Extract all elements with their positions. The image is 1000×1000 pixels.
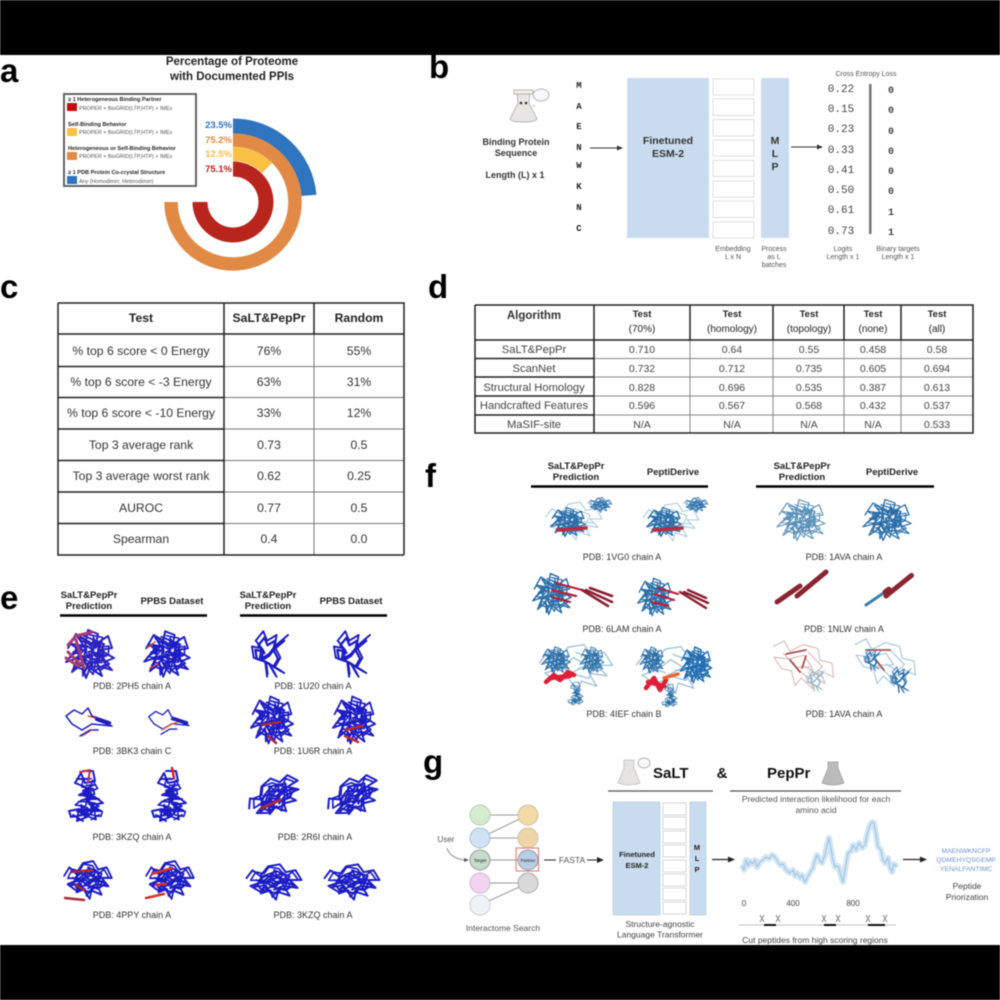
column headers: SaLT&PepPr	[548, 461, 605, 472]
column headers: PeptiDerive	[647, 467, 699, 478]
ESM block: ESM-2	[626, 861, 648, 870]
chart caption: amino acid	[795, 805, 837, 815]
protein structures	[531, 497, 924, 707]
table grid	[475, 305, 973, 433]
logits: 0.73	[828, 226, 854, 238]
table text: (homology)	[707, 324, 757, 335]
table text: 33%	[257, 406, 281, 420]
structure captions: PDB: 2PH5 chain A	[93, 681, 171, 691]
sequence letters: A	[576, 102, 582, 112]
panel e: PPBS structure comparison	[0, 579, 387, 920]
panel a: proteome PPI radial chart	[0, 52, 309, 264]
logits: 0.41	[828, 165, 855, 177]
table text: (70%)	[629, 324, 655, 335]
table text: 0.25	[347, 469, 371, 483]
logits: 0.61	[828, 205, 855, 217]
table text: N/A	[723, 419, 741, 431]
heading: SaLT and PepPr: PepPr	[767, 765, 811, 782]
structure captions: PDB: 1NLW chain A	[804, 624, 884, 634]
interactome caption: Interactome Search	[466, 923, 540, 933]
structure captions: PDB: 1U20 chain A	[274, 681, 352, 691]
chart axis labels: 800	[846, 899, 860, 908]
table text: Random	[335, 311, 384, 325]
structure captions	[92, 681, 353, 920]
sequence letters: E	[576, 122, 582, 132]
percentage labels	[205, 120, 233, 175]
binary targets: 0	[888, 106, 894, 117]
structure captions	[582, 552, 884, 719]
table text: (all)	[929, 324, 945, 335]
table text: N/A	[633, 419, 651, 431]
column headers: Prediction	[779, 472, 825, 483]
table text: N/A	[864, 419, 882, 431]
transformer caption: Language Transformer	[617, 930, 703, 940]
column headers: Prediction	[245, 601, 291, 612]
table text: 0.5	[351, 438, 368, 452]
column headers	[60, 590, 387, 616]
panel b: model architecture	[429, 48, 920, 269]
logits: 0.22	[828, 84, 854, 96]
table text: Test	[864, 309, 883, 320]
binary targets: 0	[888, 86, 894, 97]
structure captions: PDB: 1U6R chain A	[274, 746, 352, 756]
peptide prioritization caption: Priorization	[946, 892, 989, 902]
panel d: algorithm comparison table	[428, 268, 973, 433]
ESM block	[613, 802, 706, 915]
table text: 0.432	[860, 400, 886, 412]
logits	[828, 84, 855, 238]
table text: % top 6 score < -3 Energy	[70, 375, 213, 389]
table text: 0.828	[629, 382, 655, 394]
logits: 0.23	[828, 124, 854, 136]
table text: 0.712	[719, 363, 745, 375]
table text: 55%	[347, 344, 371, 358]
input description: Length (L) x 1	[486, 170, 544, 180]
percentage labels: 75.1%	[205, 164, 233, 175]
table text	[67, 311, 384, 546]
column headers: Prediction	[66, 601, 112, 612]
structure captions: PDB: 4PPY chain A	[93, 910, 171, 920]
logits: 0.50	[828, 185, 854, 197]
sequence letters: C	[576, 224, 582, 234]
table text: ScanNet	[513, 363, 556, 375]
binary targets: 0	[888, 167, 894, 178]
radial bars	[171, 126, 309, 264]
peptide cuts	[739, 915, 896, 925]
FASTA arrow: FASTA	[559, 855, 585, 865]
structure captions: PDB: 2R6I chain A	[278, 832, 352, 842]
legend: Heterogeneous or Self-Binding Behavior	[68, 146, 177, 152]
structure captions: PDB: 3BK3 chain C	[93, 746, 172, 756]
table text: 0.596	[629, 400, 655, 412]
input description: Binding Protein	[482, 137, 550, 147]
table text: MaSIF-site	[507, 419, 561, 431]
arrow: MLP to logits	[791, 144, 823, 150]
sequence letters: N	[576, 203, 582, 213]
architecture captions: L x N	[725, 254, 741, 261]
chart axis labels: 400	[786, 899, 800, 908]
binary targets	[888, 86, 894, 239]
legend: PROPER + BioGRID(LTP,HTP) + IMEx	[79, 154, 173, 160]
logits: 0.33	[828, 145, 854, 157]
table text: 0.58	[927, 344, 947, 356]
MLP block: P	[771, 161, 779, 173]
column headers: Prediction	[553, 472, 599, 483]
table text: 0.537	[924, 400, 950, 412]
ESM-2 block	[627, 78, 709, 238]
architecture captions: Length x 1	[882, 254, 914, 261]
binary targets: 0	[888, 127, 894, 138]
table text: 0.0	[351, 532, 368, 546]
table text: 0.387	[860, 382, 886, 394]
chart title: with Documented PPIs	[169, 71, 294, 83]
cut caption: Cut peptides from high scoring regions	[742, 935, 888, 945]
table text: 0.568	[796, 400, 822, 412]
architecture captions: as L	[767, 254, 781, 261]
binary targets: 1	[888, 228, 894, 239]
column headers: SaLT&PepPr	[774, 461, 831, 472]
heading: SaLT and PepPr: SaLT	[653, 765, 689, 782]
peptide prioritization caption: Peptide	[953, 881, 982, 891]
table text: Test	[129, 311, 153, 325]
panel c: benchmark table	[0, 268, 404, 555]
table text: (none)	[859, 324, 887, 335]
label f: f	[425, 457, 437, 494]
input description: Sequence	[495, 148, 537, 158]
table text	[480, 309, 950, 431]
table text: 63%	[257, 375, 281, 389]
table text: Algorithm	[507, 310, 561, 322]
percentage labels: 75.2%	[205, 135, 233, 146]
sequence letters: W	[576, 161, 582, 171]
sequence letters: N	[576, 143, 582, 153]
table text: Test	[928, 309, 947, 320]
peptide sequences	[936, 848, 996, 873]
table text: 0.567	[719, 400, 745, 412]
table text: Test	[800, 309, 819, 320]
architecture captions: batches	[762, 262, 787, 269]
chart axis labels: 0	[742, 899, 747, 908]
table text: AUROC	[119, 501, 163, 515]
legend: ≥ 1 PDB Protein Co-crystal Structure	[68, 170, 165, 176]
column headers: PPBS Dataset	[141, 596, 204, 607]
architecture captions: Process	[761, 246, 787, 253]
sequence letters	[576, 81, 582, 234]
table text: 76%	[257, 344, 281, 358]
divider bar	[869, 84, 872, 234]
structure captions: PDB: 3KZQ chain A	[92, 832, 172, 842]
architecture captions: Logits	[834, 246, 853, 253]
column headers: PeptiDerive	[866, 467, 918, 478]
chart title: Percentage of Proteome	[166, 56, 298, 68]
binary targets: 0	[888, 187, 894, 198]
binary targets: 1	[888, 208, 894, 219]
label c: c	[0, 268, 18, 305]
table text: 0.62	[257, 469, 281, 483]
table text: SaLT&PepPr	[233, 311, 306, 325]
icon: salt flask with thought bubble	[510, 89, 549, 122]
column headers: SaLT&PepPr	[61, 590, 118, 601]
table text: 0.55	[799, 344, 819, 356]
loss title: Cross Entropy Loss	[835, 71, 897, 78]
ESM block: M	[694, 843, 700, 852]
arrow to peptides	[903, 856, 927, 862]
column headers: PPBS Dataset	[320, 596, 383, 607]
chart axis labels	[742, 899, 860, 908]
peptide sequences: MAENWKNCFP	[941, 848, 991, 855]
table text: 0.613	[924, 382, 950, 394]
table text: 0.605	[860, 363, 886, 375]
user arrow	[438, 835, 469, 862]
interactome network	[470, 805, 538, 915]
heading: SaLT and PepPr	[608, 758, 901, 791]
legend: Any (Homodimer, Heterodimer)	[79, 179, 154, 185]
legend: ≥ 1 Heterogeneous Binding Partner	[68, 97, 162, 103]
peptide sequences: YENALFANTIMC	[940, 866, 992, 873]
protein structures	[64, 628, 387, 900]
table text: 0.458	[860, 344, 886, 356]
transformer caption: Structure-agnostic	[626, 919, 695, 929]
heading: SaLT and PepPr: &	[717, 765, 728, 782]
structure captions: PDB: 1VG0 chain A	[583, 552, 661, 562]
table text: Handcrafted Features	[480, 400, 589, 412]
column headers: SaLT&PepPr	[240, 590, 297, 601]
legend: Self-Binding Behavior	[68, 122, 127, 128]
table text: 0.64	[722, 344, 742, 356]
table text: 0.5	[351, 501, 368, 515]
ESM block: L	[695, 854, 700, 863]
table text: N/A	[800, 419, 818, 431]
table text: SaLT&PepPr	[502, 344, 567, 356]
peptide sequences: QDMEHYQSGEMP	[936, 857, 996, 864]
architecture captions: Binary targets	[876, 246, 920, 253]
table text: Test	[633, 309, 652, 320]
structure captions: PDB: 4IEF chain B	[586, 709, 662, 719]
ESM block: P	[694, 865, 700, 874]
table text: Top 3 average worst rank	[73, 469, 210, 483]
table text: Structural Homology	[483, 382, 585, 394]
table text: % top 6 score < -10 Energy	[67, 406, 216, 420]
table text: 0.732	[629, 363, 655, 375]
structure captions: PDB: 6LAM chain A	[582, 624, 662, 634]
user arrow: User	[438, 835, 455, 844]
table text: Top 3 average rank	[89, 438, 194, 452]
label a: a	[0, 52, 19, 89]
legend: PROPER + BioGRID(LTP,HTP) + IMEx	[79, 106, 173, 112]
embedding tiles	[713, 79, 754, 238]
label e: e	[0, 579, 18, 616]
table text: (topology)	[787, 324, 831, 335]
table text: 0.710	[629, 344, 655, 356]
ESM-2 block: ESM-2	[652, 148, 684, 160]
arrow to chart	[712, 856, 735, 862]
table text: 0.73	[257, 438, 281, 452]
table text: Test	[723, 309, 742, 320]
interactome network: Target	[474, 858, 487, 863]
label d: d	[428, 268, 448, 305]
label g: g	[423, 743, 443, 780]
panel f: PeptiDerive structure comparison	[425, 457, 934, 719]
percentage labels: 23.5%	[205, 120, 233, 131]
MLP block: M	[771, 135, 780, 147]
table text: 0.535	[796, 382, 822, 394]
sequence letters: M	[576, 81, 582, 91]
ESM-2 block: Finetuned	[643, 135, 693, 147]
label b: b	[429, 48, 449, 85]
binary targets: 0	[888, 147, 894, 158]
legend: PROPER + BioGRID(LTP,HTP) + IMEx	[79, 130, 173, 136]
chart caption: Predicted interaction likelihood for each	[742, 794, 890, 804]
FASTA arrow	[544, 855, 604, 865]
architecture captions	[715, 246, 920, 269]
table text: 31%	[347, 375, 371, 389]
panel g: SaLT and PepPr workflow	[423, 743, 996, 945]
line chart: interaction likelihood	[742, 822, 897, 882]
table text: 0.735	[796, 363, 822, 375]
table text: 0.4	[261, 532, 278, 546]
structure captions: PDB: 1AVA chain A	[806, 552, 882, 562]
table text: 0.694	[924, 363, 950, 375]
table text: % top 6 score < 0 Energy	[72, 344, 210, 358]
table grid	[58, 303, 404, 555]
table text: 0.77	[257, 501, 281, 515]
column headers	[531, 461, 934, 486]
architecture captions: Length x 1	[827, 254, 859, 261]
ESM block: Finetuned	[619, 850, 655, 859]
structure captions: PDB: 3KZQ chain A	[273, 910, 353, 920]
MLP block	[761, 78, 789, 238]
arrow: sequence to ESM	[590, 146, 623, 150]
legend	[64, 94, 196, 186]
sequence letters: K	[576, 182, 582, 192]
percentage labels: 12.5%	[205, 149, 233, 160]
MLP block: L	[772, 148, 779, 160]
interactome network: Partner	[521, 858, 536, 863]
table text: 0.696	[719, 382, 745, 394]
table text: Spearman	[113, 532, 169, 546]
structure captions: PDB: 1AVA chain A	[806, 709, 882, 719]
table text: 12%	[347, 406, 371, 420]
logits: 0.15	[828, 104, 854, 116]
architecture captions: Embedding	[715, 246, 751, 253]
table text: 0.533	[924, 419, 950, 431]
